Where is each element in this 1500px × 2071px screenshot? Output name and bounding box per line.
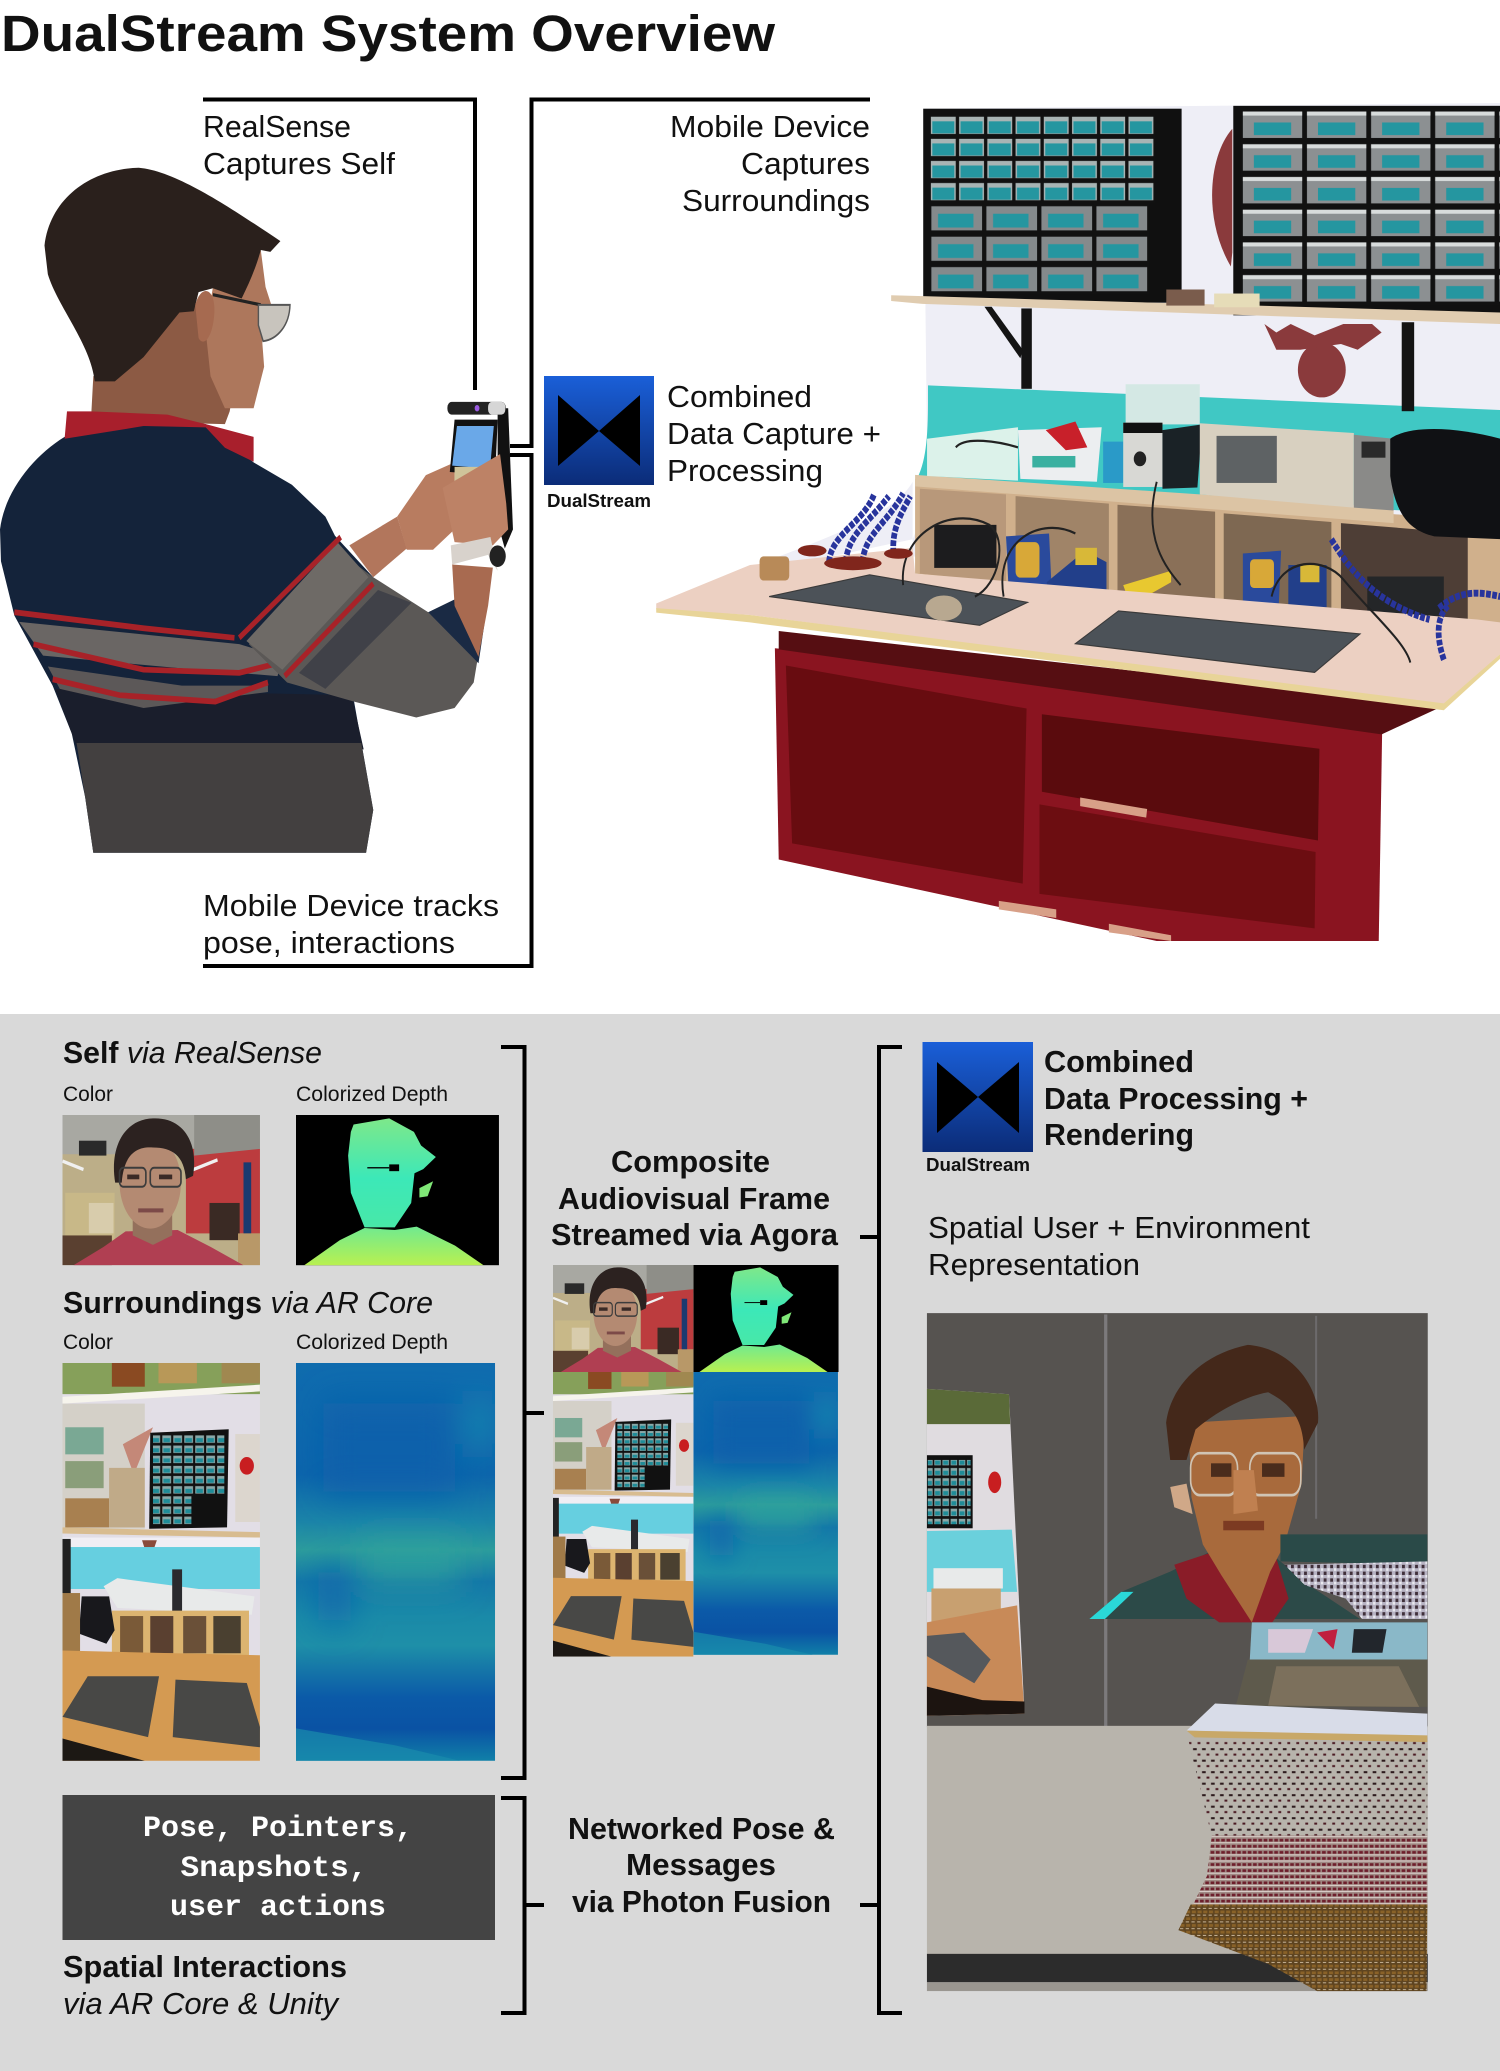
- person sweater body: [0, 424, 373, 853]
- icon: DualStream logo: DualStream: [547, 491, 651, 511]
- heading: spatial interactions: via AR Core & Unity: [63, 1986, 340, 2021]
- icon: DualStream logo: [544, 376, 654, 511]
- left parts organizer: [923, 109, 1182, 303]
- label: combined data capture and processing: Data Capture +: [667, 416, 881, 451]
- photo: person holding mobile device with RealSense camera: [0, 168, 513, 853]
- heading: networked pose and messages: Networked Pose &: [568, 1811, 835, 1846]
- bracket: spatial interactions to networked messages: [501, 1798, 544, 2013]
- panel: pose, pointers, snapshots, user actions: user actions: [170, 1891, 386, 1925]
- red cabinet: [775, 648, 1383, 941]
- connector: RealSense captures self: [203, 100, 475, 390]
- heading: networked pose and messages: via Photon Fusion: [572, 1884, 831, 1919]
- heading: composite audiovisual frame: [551, 1144, 839, 1252]
- photo: self color feed: [62, 1115, 260, 1265]
- icon: DualStream logo: [922, 1042, 1033, 1175]
- phone and RealSense rig: [447, 402, 513, 549]
- heading: self via RealSense: Self via RealSense: [63, 1035, 322, 1070]
- shelf: [891, 295, 1500, 324]
- table top: [656, 548, 1500, 710]
- label: RealSense captures self: [203, 109, 395, 181]
- label: mobile device tracks pose: [203, 888, 499, 960]
- point cloud shelves: [1187, 1534, 1427, 1742]
- sweater dark lower band: [55, 689, 364, 749]
- heading: composite audiovisual frame: Streamed via Agora: [551, 1217, 839, 1252]
- heading: spatial interactions: Spatial Interactions: [63, 1949, 347, 1984]
- connector: mobile device tracks pose: [203, 455, 532, 966]
- sweater sleeve: [249, 549, 483, 718]
- heading: networked pose and messages: [568, 1811, 835, 1919]
- oscilloscope and lab instruments: [1200, 423, 1394, 510]
- soldering stations: [934, 525, 1444, 620]
- forearm and hands: [452, 564, 493, 657]
- label: RealSense captures self: RealSense: [203, 109, 351, 144]
- bench power supply: [1123, 423, 1202, 489]
- person ear: [195, 291, 214, 342]
- panel: pose, pointers, snapshots, user actions: Pose, Pointers,: [143, 1812, 413, 1846]
- right parts organizer: [1233, 106, 1500, 315]
- inset surroundings video plane: [927, 1389, 1024, 1716]
- shelf brackets: [984, 307, 1414, 411]
- label: combined data capture and processing: Combined: [667, 379, 812, 414]
- front hand: [443, 454, 508, 545]
- brass tip cleaner: [760, 556, 789, 581]
- wall: [750, 103, 1500, 631]
- bracket: combined input to rendering: [860, 1047, 902, 2013]
- label: combined data capture and processing: Processing: [667, 453, 823, 488]
- small metal tin: [926, 595, 962, 621]
- table underside shadow: [779, 631, 1444, 734]
- label: mobile device tracks pose: Mobile Device tracks: [203, 888, 499, 923]
- label: mobile device captures surroundings: Surroundings: [682, 183, 870, 218]
- heading: combined data processing and rendering: Data Processing +: [1044, 1081, 1308, 1116]
- point cloud bench front: [1178, 1741, 1427, 1991]
- heading: composite audiovisual frame: Composite: [611, 1144, 770, 1179]
- connector: mobile device captures surroundings: [510, 100, 870, 446]
- room wall: [927, 1313, 1428, 1991]
- sweater red stripes: [14, 612, 278, 702]
- bracket: self and surroundings to composite: [501, 1047, 544, 1778]
- heading: composite audiovisual frame: Audiovisual Frame: [558, 1181, 830, 1216]
- label: mobile device captures surroundings: Mobile Device: [670, 109, 870, 144]
- photo: electronics workbench: [656, 103, 1500, 941]
- heading: combined data processing and rendering: [1044, 1044, 1308, 1152]
- image: rendered spatial user and environment view: [927, 1313, 1428, 1991]
- label: combined data capture and processing: [667, 379, 881, 488]
- wrist watch: [451, 537, 506, 571]
- person glasses: [213, 295, 290, 341]
- heading: combined data processing and rendering: Rendering: [1044, 1117, 1194, 1152]
- label: self colorized depth: Colorized Depth: [296, 1083, 448, 1106]
- heading: surroundings via AR Core: Surroundings via AR Core: [63, 1285, 433, 1320]
- collar: [65, 411, 254, 462]
- person face: [206, 250, 273, 408]
- label: mobile device captures surroundings: [670, 109, 870, 218]
- icon: DualStream logo: DualStream: [926, 1155, 1030, 1175]
- label: mobile device tracks pose: pose, interactions: [203, 925, 455, 960]
- sweater gray stripe: [19, 622, 282, 676]
- hose bases: [798, 545, 913, 570]
- cubby shelves: [915, 475, 1500, 631]
- sweater lower gray band: [77, 743, 373, 853]
- heading: combined data processing and rendering: Combined: [1044, 1044, 1194, 1079]
- label: surroundings color: Color: [63, 1331, 113, 1354]
- wall art: [1212, 129, 1382, 397]
- panel: pose, pointers, snapshots, user actions: [62, 1795, 495, 1940]
- label: RealSense captures self: Captures Self: [203, 146, 395, 181]
- label: spatial user and environment representation: Spatial User + Environment: [928, 1210, 1310, 1245]
- photo: surroundings color feed: [62, 1363, 260, 1761]
- image: surroundings colorized depth: [296, 1363, 495, 1761]
- label: mobile device captures surroundings: Captures: [741, 146, 870, 181]
- heading: networked pose and messages: Messages: [626, 1847, 776, 1882]
- label: self color: Color: [63, 1083, 113, 1106]
- image: composite audiovisual frame: [553, 1265, 839, 1657]
- label: spatial user and environment representation: Representation: [928, 1247, 1140, 1282]
- image: self colorized depth: [296, 1115, 499, 1265]
- panel: pose, pointers, snapshots, user actions: Snapshots,: [180, 1852, 368, 1886]
- wires: [903, 441, 1410, 663]
- title: DualStream System Overview: [1, 5, 775, 62]
- rendered person: [1089, 1345, 1360, 1622]
- heading: spatial interactions: [63, 1949, 347, 2021]
- label: surroundings colorized depth: Colorized Depth: [296, 1331, 448, 1354]
- storage bins on counter: [927, 384, 1200, 483]
- blue flexible hoses: [829, 493, 1500, 660]
- person hair: [45, 168, 280, 381]
- person neck: [91, 293, 239, 424]
- teal wall band: [915, 385, 1500, 516]
- label: spatial user and environment representation: [928, 1210, 1310, 1282]
- panel: gray system data flow background: [0, 1014, 1500, 2071]
- electronics mats: [769, 575, 1360, 672]
- black fume extractor: [1390, 429, 1500, 539]
